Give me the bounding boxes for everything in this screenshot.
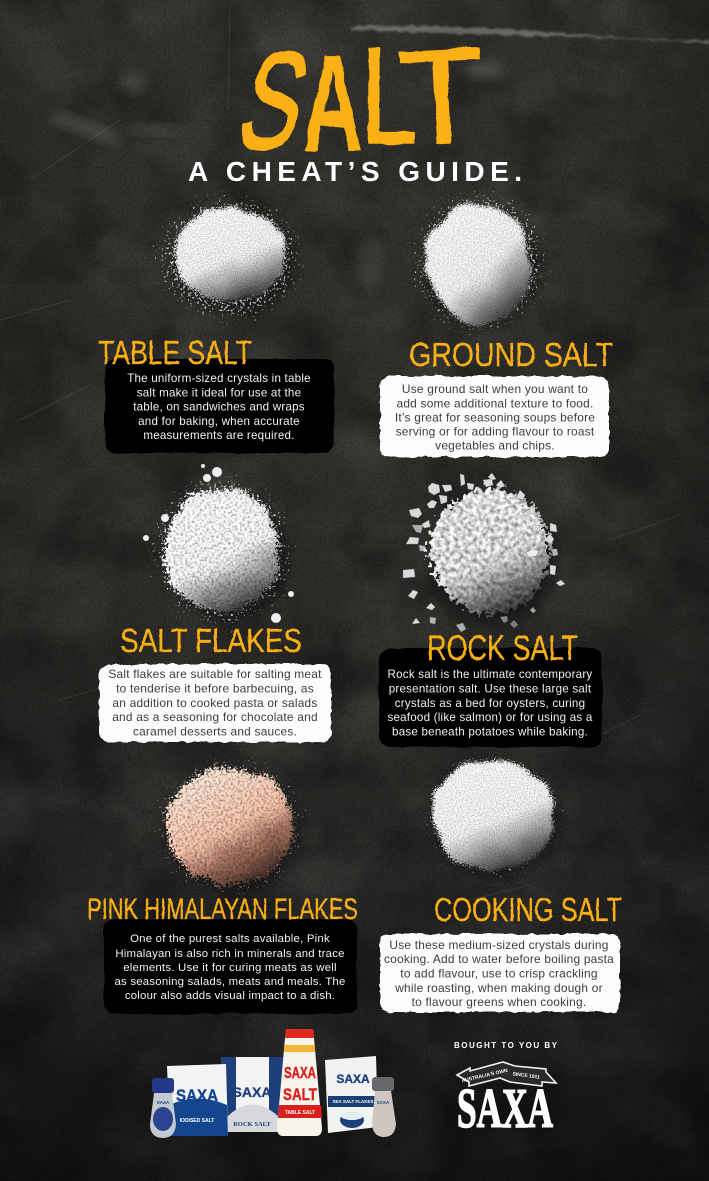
product: table salt shaker	[277, 1029, 322, 1136]
product: table salt shaker: SALT	[283, 1085, 317, 1104]
panel: ground salt	[380, 376, 609, 457]
text: pink himalayan description: elements. Use it for curing meats as well	[123, 962, 337, 974]
text: salt flakes description: an addition to cooked pasta or salads	[112, 696, 318, 710]
product: blue grinder: SAXA	[157, 1100, 170, 1105]
text: rock salt description: seafood (like salmon) or for using as a	[387, 711, 593, 724]
text: salt flakes description: caramel desserts and sauces.	[133, 724, 297, 738]
text: cooking salt description: cooking. Add to water before boiling pasta	[384, 952, 614, 966]
text: ground salt description: It’s great for seasoning soups before	[395, 410, 595, 424]
text: pink himalayan description: One of the purest salts available, Pink	[130, 933, 330, 945]
photo: cooking salt pile	[411, 740, 575, 892]
heading: table salt: TABLE SALT	[98, 334, 252, 371]
heading: salt flakes: SALT FLAKES	[120, 622, 302, 659]
product: sea salt flakes box: SAXA	[336, 1072, 370, 1086]
logo: Saxa: SINCE 1911	[512, 1071, 540, 1081]
product: iodised salt bag: SAXA	[176, 1086, 218, 1105]
heading: rock salt: ROCK SALT	[427, 629, 578, 668]
text: cooking salt description: while roasting, when making dough or	[394, 981, 603, 995]
text: cooking salt description: to flavour greens when cooking.	[412, 995, 586, 1009]
product: grey grinder	[372, 1077, 396, 1137]
text: table salt description: and for baking, when accurate	[138, 415, 300, 428]
label: bought to you by: BOUGHT TO YOU BY	[454, 1041, 558, 1050]
product: sea salt flakes box	[325, 1056, 378, 1133]
title: T	[396, 19, 488, 174]
panel: table salt	[105, 359, 334, 453]
title: S	[225, 25, 323, 178]
photo: pink himalayan pile	[138, 740, 322, 912]
subtitle: A CHEAT’S GUIDE.	[188, 156, 522, 187]
text: rock salt description: presentation salt. Use these large salt	[389, 682, 592, 696]
product: sea salt flakes box: SEA SALT FLAKES	[332, 1099, 374, 1104]
text: table salt description: table, on sandwiches and wraps	[133, 400, 305, 414]
text: cooking salt description: to add flavour, use to crisp crackling	[400, 966, 598, 980]
logo: Saxa: AUSTRALIA'S OWN	[461, 1068, 509, 1084]
product: grey grinder: SAXA	[377, 1100, 390, 1105]
panel: cooking salt	[380, 934, 620, 1012]
photo: rock salt pile	[403, 473, 566, 633]
product range	[150, 1029, 396, 1138]
text: pink himalayan description: as seasoning salads, meats and meals. The	[114, 976, 346, 988]
title	[225, 19, 488, 181]
heading: pink himalayan flakes: PINK HIMALAYAN FLAKES	[87, 893, 358, 926]
text: ground salt description: serving or for adding flavour to roast	[396, 424, 595, 438]
logo: Saxa	[457, 1062, 556, 1140]
text: table salt description: measurements are required.	[143, 429, 295, 442]
panel: pink himalayan	[104, 919, 357, 1014]
product: blue grinder	[150, 1078, 176, 1138]
text: rock salt description: crystals as a bed for oysters, curing	[395, 697, 585, 710]
photo: ground salt pile	[396, 174, 564, 350]
text: pink himalayan description: colour also adds visual impact to a dish.	[125, 990, 335, 1002]
product: rock salt bag	[221, 1057, 285, 1132]
text: rock salt description: base beneath potatoes while baking.	[392, 726, 588, 738]
photo: table salt pile	[137, 178, 321, 338]
text: salt flakes description: and as a seasoning for chocolate and	[112, 710, 318, 724]
product: rock salt bag: ROCK SALT	[233, 1121, 271, 1128]
text: rock salt description: Rock salt is the ultimate contemporary	[388, 668, 592, 681]
text: ground salt description: vegetables and chips.	[435, 438, 555, 452]
text: pink himalayan description: Himalayan is also rich in minerals and trace	[115, 948, 345, 960]
logo: Saxa: SAXA	[457, 1078, 553, 1140]
text: table salt description: salt make it ideal for use at the	[137, 386, 301, 400]
product: table salt shaker: SAXA	[284, 1065, 316, 1082]
product: table salt shaker: TABLE SALT	[285, 1110, 315, 1116]
heading: cooking salt: COOKING SALT	[434, 891, 622, 928]
text: salt flakes description: to tenderise it before barbecuing, as	[116, 682, 314, 696]
product: iodised salt bag: IODISED SALT	[180, 1118, 214, 1124]
photo: salt flakes pile	[134, 456, 310, 644]
product: rock salt bag: SAXA	[233, 1084, 271, 1100]
panel: rock salt	[379, 648, 602, 747]
text: salt flakes description: Salt flakes are suitable for salting meat	[108, 667, 322, 681]
product: iodised salt bag	[167, 1064, 228, 1136]
text: ground salt description: add some additional texture to food.	[397, 396, 593, 410]
panel: salt flakes	[99, 664, 331, 742]
rock salt crystals	[403, 473, 565, 632]
heading: ground salt: GROUND SALT	[409, 336, 613, 373]
title: A	[302, 27, 363, 181]
title: L	[361, 21, 417, 173]
text: ground salt description: Use ground salt when you want to	[402, 382, 588, 396]
text: cooking salt description: Use these medium-sized crystals during	[389, 938, 609, 952]
text: table salt description: The uniform-sized crystals in table	[127, 372, 311, 385]
